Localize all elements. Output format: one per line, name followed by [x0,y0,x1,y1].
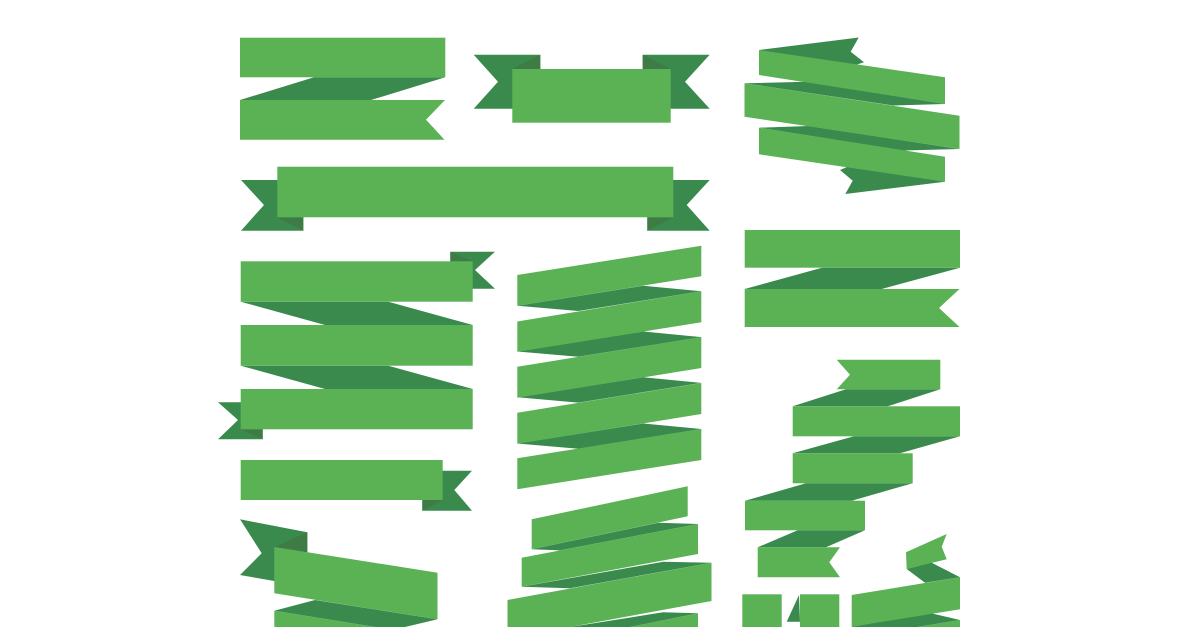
ribbon: small banner with two tails [474,55,710,123]
ribbon: wide banner with folded tails [241,167,710,231]
ribbon: cropped bottom pieces [742,594,839,627]
ribbon: bottom-right slanted ribbon with tail [852,534,960,627]
ribbon: slanted three-band ribbon, top right [744,38,960,194]
ribbon: single band with right tail [241,460,472,511]
ribbon: centre zig-zag with five slanted bands [517,246,701,489]
ribbon: right two-fold banner [745,230,960,327]
ribbon: three-band banner with tails [218,252,495,439]
ribbon: bottom-left slanted ribbon with tail [240,519,438,627]
ribbon: lower centre widening slanted bands [508,486,712,627]
ribbon: stair-stepped ribbon [745,360,960,577]
ribbon: top-left two-fold banner [240,38,445,140]
